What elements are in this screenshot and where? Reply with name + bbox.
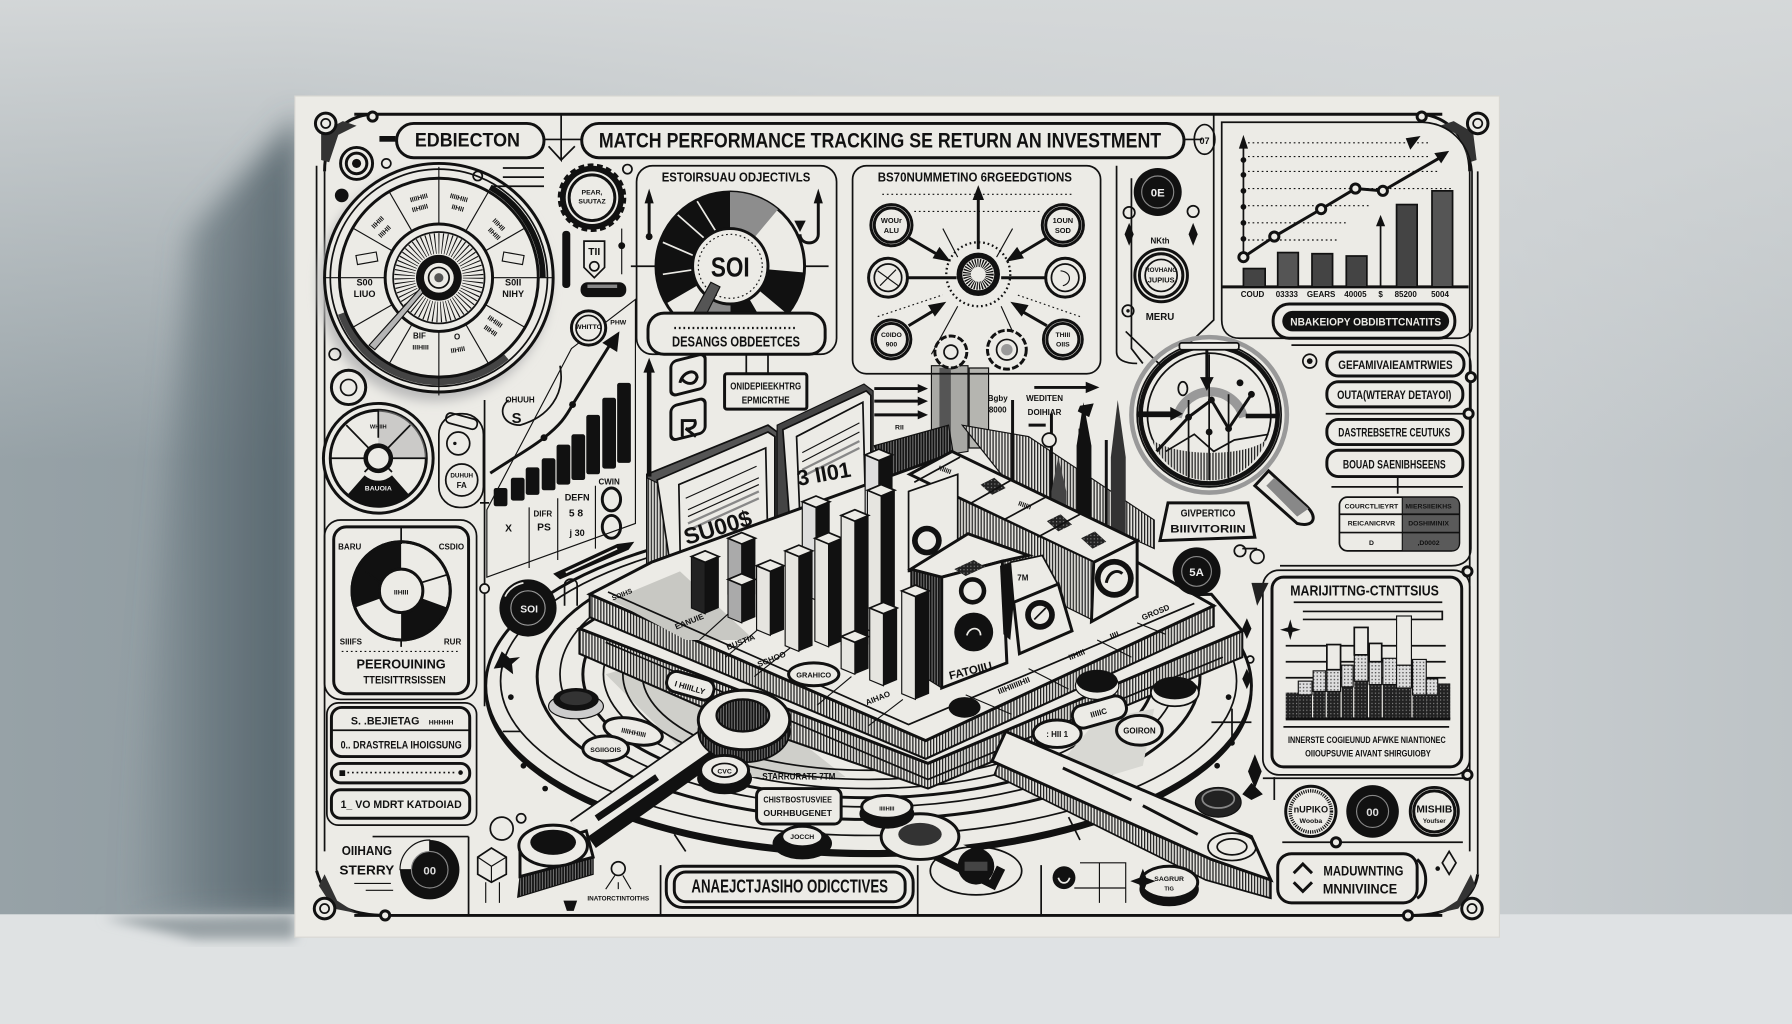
ring icon: [490, 814, 526, 840]
panel heading: MARIJITTNG-CTNTTSIUS: [1290, 583, 1439, 599]
ring dial: [1135, 249, 1187, 302]
node bottom right: [1043, 320, 1082, 359]
list box top: 0.. DRASTRELA IHOIGSUNG: [341, 740, 462, 752]
node top left: WOUr: [881, 216, 902, 225]
pill maduwnting: MADUWNTING: [1323, 863, 1403, 878]
panel bottom analytics pill: ANAEJCTJASIHO ODICCTIVES: [691, 876, 888, 897]
circle one: nUPIKO: [1294, 805, 1328, 815]
isometric platform: [579, 455, 1242, 789]
circle three: MISHIB: [1416, 805, 1452, 816]
label box onidepieekhtrg: ONIDEPIEEKHTRG: [730, 382, 801, 393]
floor labels: AIHAO: [864, 689, 892, 707]
panel caption: PEEROUINING: [357, 658, 446, 672]
wheel sector labels: IIHIIII: [486, 315, 503, 330]
axis labels: 03333: [1276, 290, 1299, 299]
bottom concentric rings: [485, 520, 1253, 857]
star: [1130, 869, 1155, 894]
node top left: ALU: [884, 226, 899, 235]
callout customer: CHISTBOSTUSVIEE: [763, 794, 832, 804]
axis labels: COUD: [1241, 290, 1265, 299]
panel table: PS: [537, 522, 551, 533]
ohuuh curl: S: [512, 411, 522, 427]
bubble top: IIIIHHIIII: [620, 727, 647, 739]
pill maduwnting: MNNIVIINCE: [1323, 882, 1397, 897]
dial 5a: 5A: [1189, 567, 1204, 579]
coin far right: [1195, 787, 1241, 817]
circle three: [1410, 787, 1458, 835]
y axis: [1239, 135, 1248, 257]
badge sagrur: [1139, 866, 1199, 906]
badge sagrur: SAGRUR: [1154, 876, 1184, 883]
axis labels: 40005: [1344, 290, 1367, 299]
wheel sector labels: BIF: [413, 331, 426, 340]
back panels and spikes behind platform: [874, 366, 1154, 549]
node bottom left: C0IDO: [881, 332, 903, 339]
donut pie: IIHIII: [394, 589, 408, 596]
left list panel: [327, 703, 477, 825]
black dial: [1134, 168, 1182, 216]
3D boxes: [911, 534, 1072, 688]
central hub: [946, 242, 1010, 306]
small targets upper left: [329, 147, 544, 405]
small gauge: [323, 403, 433, 513]
comparison table: D: [1369, 540, 1374, 547]
corner labels: BARU: [338, 543, 361, 552]
box small: 7M: [1017, 574, 1029, 583]
badge sagrur: TIG: [1164, 886, 1174, 892]
pill desangs: [648, 313, 825, 354]
icon person: [606, 862, 631, 889]
pill two: [1327, 382, 1463, 407]
tag right: [1070, 693, 1129, 731]
wheel sector labels: IIHII: [451, 204, 465, 214]
floor labels: EANUIE: [674, 612, 706, 632]
title pill: MATCH PERFORMANCE TRACKING SE RETURN AN INVESTMENT: [599, 129, 1161, 152]
wheel sector labels: IIHIII: [371, 215, 386, 231]
book two: [777, 384, 873, 537]
strategy dial block: OIIHANG: [342, 844, 392, 858]
circle three: Youfser: [1423, 818, 1446, 825]
wheel sector labels: IIIHIII: [412, 345, 429, 352]
node bottom right: THIII: [1055, 332, 1070, 339]
list box top: S. .BEJIETAG: [351, 716, 420, 728]
black pill: NBAKEIOPY OBDIBTTCNATITS: [1290, 317, 1441, 329]
heading pill edbiection: EDBIECTON: [415, 129, 520, 151]
rising bars: [494, 383, 631, 506]
panel table: 5 8: [569, 509, 583, 520]
circle two: 00: [1366, 807, 1379, 819]
ohuuh curl: [503, 366, 561, 427]
book two: 3 II01: [795, 457, 853, 491]
vertical axis line left: [480, 400, 489, 706]
ring dial: ROVHANG: [1145, 267, 1177, 274]
wheel sector labels: IIHIII: [450, 346, 466, 355]
rising arrow: [490, 331, 619, 473]
wheel sector labels: IIHIIII: [411, 203, 429, 214]
icon cube: [478, 848, 506, 903]
pen: [553, 542, 634, 579]
panel heading: ESTOIRSUAU ODJECTIVLS: [662, 170, 810, 185]
floor labels: SGHOO: [756, 650, 787, 669]
pill two: OUTA(WTERAY DETAYOI): [1337, 388, 1451, 402]
wheel sector labels: IIIIHIII: [449, 193, 468, 204]
wheel sector labels: IIHIII: [486, 227, 501, 242]
hub arrows: [878, 185, 1080, 354]
title pill: [582, 123, 1184, 158]
node mid left: [869, 258, 907, 297]
wheel sector labels: S0II: [505, 278, 521, 288]
coin left: [549, 688, 603, 719]
shield tag: TII: [588, 247, 600, 258]
mid labels under hub: RII: [895, 425, 904, 432]
pill desangs: DESANGS OBDEETCES: [672, 334, 800, 350]
wrench right: [992, 731, 1271, 898]
coin bottom: IIIIHIII: [879, 806, 895, 812]
pie chart soi: SOI: [711, 252, 750, 283]
mid labels under hub: WEDITEN: [1026, 394, 1063, 403]
performance pie panel: [325, 520, 477, 699]
token black ball: [1053, 863, 1126, 903]
bubble goiron: [1117, 715, 1162, 745]
tag right: IIIIIC: [1089, 706, 1108, 720]
corner labels: SIIIFS: [340, 638, 363, 647]
title connectors: 07: [1199, 136, 1210, 146]
wrench small: [881, 814, 1000, 880]
speech bubble on platform: GRAHICO: [796, 671, 831, 680]
axis labels: GEARS: [1307, 290, 1336, 299]
gauge side panel: [439, 412, 483, 507]
node top right: 1OUN: [1053, 216, 1073, 225]
book one: SU00$: [680, 504, 755, 550]
outer frame with corner ornaments: [314, 112, 1488, 920]
black pill: [1273, 304, 1455, 338]
panel table: DIFR: [534, 510, 552, 519]
corner labels: CSDIO: [439, 543, 464, 552]
books: [647, 384, 873, 610]
caption menu: MERU: [1146, 312, 1174, 323]
tag right lower: : HII 1: [1046, 730, 1069, 739]
list box dotted: [331, 763, 470, 783]
black capsule: [562, 165, 632, 297]
panel table: CWIN: [598, 478, 620, 487]
panel table: [505, 478, 621, 568]
circle column menu: [1117, 114, 1214, 368]
panel segmenting objectives hub: [853, 166, 1101, 374]
mid labels under hub: Bgby: [988, 394, 1008, 403]
axis labels: [1241, 290, 1449, 299]
circle one: Wooba: [1300, 818, 1322, 825]
dial 5a: [1173, 545, 1264, 595]
icon boxes: [671, 353, 705, 441]
node bottom right: OIIS: [1056, 341, 1070, 348]
floor labels: IIHIII: [1067, 647, 1086, 662]
mid labels under hub: DOIHIAR: [1028, 408, 1062, 417]
floor labels: IIIHIIIIIHII: [997, 675, 1031, 696]
box small: [1000, 555, 1072, 654]
wheel sector labels: [354, 193, 524, 355]
tag left: [664, 669, 716, 702]
coin right top: [1075, 670, 1119, 699]
node top left: [871, 205, 912, 246]
tag left: I HIIILLY: [674, 679, 707, 697]
shield tag: [584, 241, 605, 278]
panel table: j 30: [569, 528, 585, 538]
magnified chart: [1157, 354, 1269, 480]
marketing stats panel: OIIOUPSUVIE AIVANT SHIRGUIOBY: [1305, 749, 1431, 759]
panel bottom analytics pill: [666, 866, 913, 907]
callout customer: [757, 789, 841, 824]
wheel needle: [369, 288, 423, 350]
panel table: X: [505, 523, 512, 534]
comparison table: [1339, 497, 1459, 551]
wheel sector labels: LIUO: [354, 289, 375, 299]
wheel sector labels: O: [454, 332, 460, 341]
floor labels: GROSD: [1140, 603, 1171, 622]
tag right lower: [1033, 720, 1081, 747]
stacked bars: [1286, 616, 1450, 719]
canvas board: [295, 96, 1499, 937]
big wheel: [292, 131, 585, 424]
coin right mid: [1151, 677, 1199, 706]
box big: [911, 534, 1029, 688]
coin centre: [697, 755, 752, 794]
gear icons: [935, 330, 1026, 369]
bars: [1243, 191, 1453, 287]
strategy dial block: STERRY: [339, 863, 395, 877]
axis labels: 85200: [1395, 290, 1417, 299]
ring dial: JUPIUS: [1148, 275, 1175, 284]
list box bottom: [331, 790, 470, 818]
panel table: DEFN: [565, 493, 590, 503]
comparison table: DOSHIMINIX: [1408, 521, 1449, 528]
node bottom left: [872, 320, 911, 359]
gauge side panel: DUHUH: [450, 473, 474, 480]
small caption: INATORCTINTOITHS: [587, 896, 650, 903]
gauge side panel: FA: [457, 481, 467, 490]
speech bubble on platform: [789, 663, 839, 686]
pill three: [1327, 419, 1463, 445]
corner labels: [338, 543, 464, 647]
bottom circles right: [1263, 567, 1472, 847]
pill one: GEFAMIVAIEAMTRWIES: [1338, 358, 1453, 372]
book one: [647, 425, 777, 610]
label box onidepieekhtrg: EPMICRTHE: [742, 395, 790, 406]
lower slab: [579, 594, 1242, 789]
magnifier: [1131, 337, 1313, 524]
coin ring: [930, 847, 1022, 895]
small gauge: WHIIH: [370, 425, 387, 431]
comparison table: MIERSIIEIKHS: [1405, 504, 1452, 511]
list box top: HHHHH: [429, 720, 454, 727]
label box onidepieekhtrg: [725, 354, 807, 409]
right list panel: [1280, 345, 1475, 566]
floor labels: IIII: [1109, 630, 1120, 641]
list box top: [331, 707, 470, 757]
black marker: [563, 901, 577, 911]
floor labels: BUSTIA: [725, 632, 756, 652]
upper slab: [590, 455, 1214, 759]
bubble top: [601, 713, 665, 750]
ohuuh curl: OHUUH: [505, 395, 535, 404]
pie chart soi: [631, 190, 829, 343]
title connectors: [379, 114, 1215, 160]
coin centre: CVC: [717, 769, 732, 776]
whitto circle: [571, 311, 606, 345]
node mid right: [1046, 258, 1085, 297]
pill four: BOUAD SAENIBHSEENS: [1343, 458, 1446, 472]
pill maduwnting: [1278, 851, 1456, 903]
wheel sector labels: IIIHII: [482, 324, 498, 338]
node bottom left: 900: [886, 341, 897, 348]
panel objectives pie: [631, 166, 837, 354]
callout customer: OURHBUGENET: [763, 808, 833, 818]
pill three: DASTREBSETRE CEUTUKS: [1338, 426, 1450, 440]
small gauge: BAUOIA: [365, 485, 392, 492]
bubble bottom: [583, 736, 629, 761]
bubble bottom: SGIIGOIS: [590, 747, 622, 754]
hub heading: BS70NUMMETINO 6RGEEDGTIONS: [878, 170, 1072, 185]
coin bottom mid: [773, 826, 832, 859]
wheel sector labels: IIIHII: [491, 218, 506, 233]
list box bottom: 1_ VO MDRT KATDOIAD: [341, 799, 462, 811]
node top right: SOD: [1055, 226, 1072, 235]
caption nkth: NKth: [1150, 236, 1170, 245]
mid labels under hub: [874, 382, 1099, 432]
wrench left: [518, 690, 790, 897]
vertical thick arrow: [643, 358, 655, 477]
bottom small icons: [478, 814, 1199, 911]
corner labels: RUR: [444, 638, 461, 647]
heading pill edbiection: [397, 123, 544, 158]
node top right: [1042, 205, 1083, 246]
bubble goiron: GOIRON: [1123, 727, 1156, 736]
gear badge: PEAR,: [582, 189, 603, 196]
black dial soi: [494, 579, 577, 674]
ring tokens and tags: [549, 669, 1241, 895]
3D long box row: IIIIIII: [1017, 500, 1032, 512]
whitto circle: WHITTO: [575, 324, 603, 331]
label behaviour: [1160, 503, 1255, 541]
rising chart panel: [487, 299, 635, 579]
panel arrows: [645, 189, 823, 243]
rising chart panel: PHW: [610, 320, 627, 327]
panel caption: INNERSTE COGIEUNUD AFWKE NIANTIONEC: [1288, 735, 1446, 745]
label behaviour: GIVPERTICO: [1181, 509, 1236, 520]
floor labels: [611, 588, 1171, 707]
line chart panel: [1222, 122, 1472, 338]
trend line: [1239, 136, 1449, 286]
black dial soi: SOI: [520, 605, 538, 616]
circle two: [1346, 785, 1399, 838]
wheel sector labels: S00: [356, 278, 373, 288]
box big: FATOIIU: [948, 660, 993, 683]
black dial: 0E: [1151, 188, 1165, 200]
marketing stats panel: [1263, 570, 1470, 775]
strategy dial block: [339, 840, 459, 899]
pill one: [1327, 352, 1464, 376]
star column: [1242, 583, 1274, 800]
floor labels: SOIHS: [611, 588, 634, 602]
start label: STARRURATE 7TM: [762, 771, 835, 781]
wheel sector labels: IIIHII: [378, 224, 393, 240]
3D long box row: [909, 451, 1137, 622]
axis labels: 5004: [1431, 290, 1449, 299]
strategy dial block: 00: [423, 865, 436, 877]
mid labels under hub: 8000: [989, 406, 1007, 415]
comparison table: COURCTLIEYRT: [1345, 504, 1399, 511]
pill four: [1327, 450, 1463, 477]
circle one: [1286, 786, 1336, 837]
label behaviour: BIIIVITORIIN: [1170, 524, 1246, 536]
comparison table: REICANICRVR: [1348, 521, 1395, 528]
axis labels: $: [1378, 290, 1383, 299]
3D long box row: IIIIIII: [937, 465, 952, 476]
small black token on platform: [949, 697, 981, 718]
comparison table: ,D0002: [1418, 540, 1440, 547]
coin bottom: [859, 795, 914, 829]
wheel sector labels: IIIIHIII: [409, 193, 429, 204]
coin bottom mid: JOCCH: [790, 834, 814, 841]
gear badge: SUUTAZ: [578, 198, 606, 205]
gear badge: [560, 166, 624, 230]
3D bars: [691, 449, 929, 699]
donut pie: [352, 528, 450, 647]
performance pie panel: TTEISITTRSISSEN: [363, 674, 446, 686]
wheel sector labels: NIHY: [502, 289, 524, 299]
